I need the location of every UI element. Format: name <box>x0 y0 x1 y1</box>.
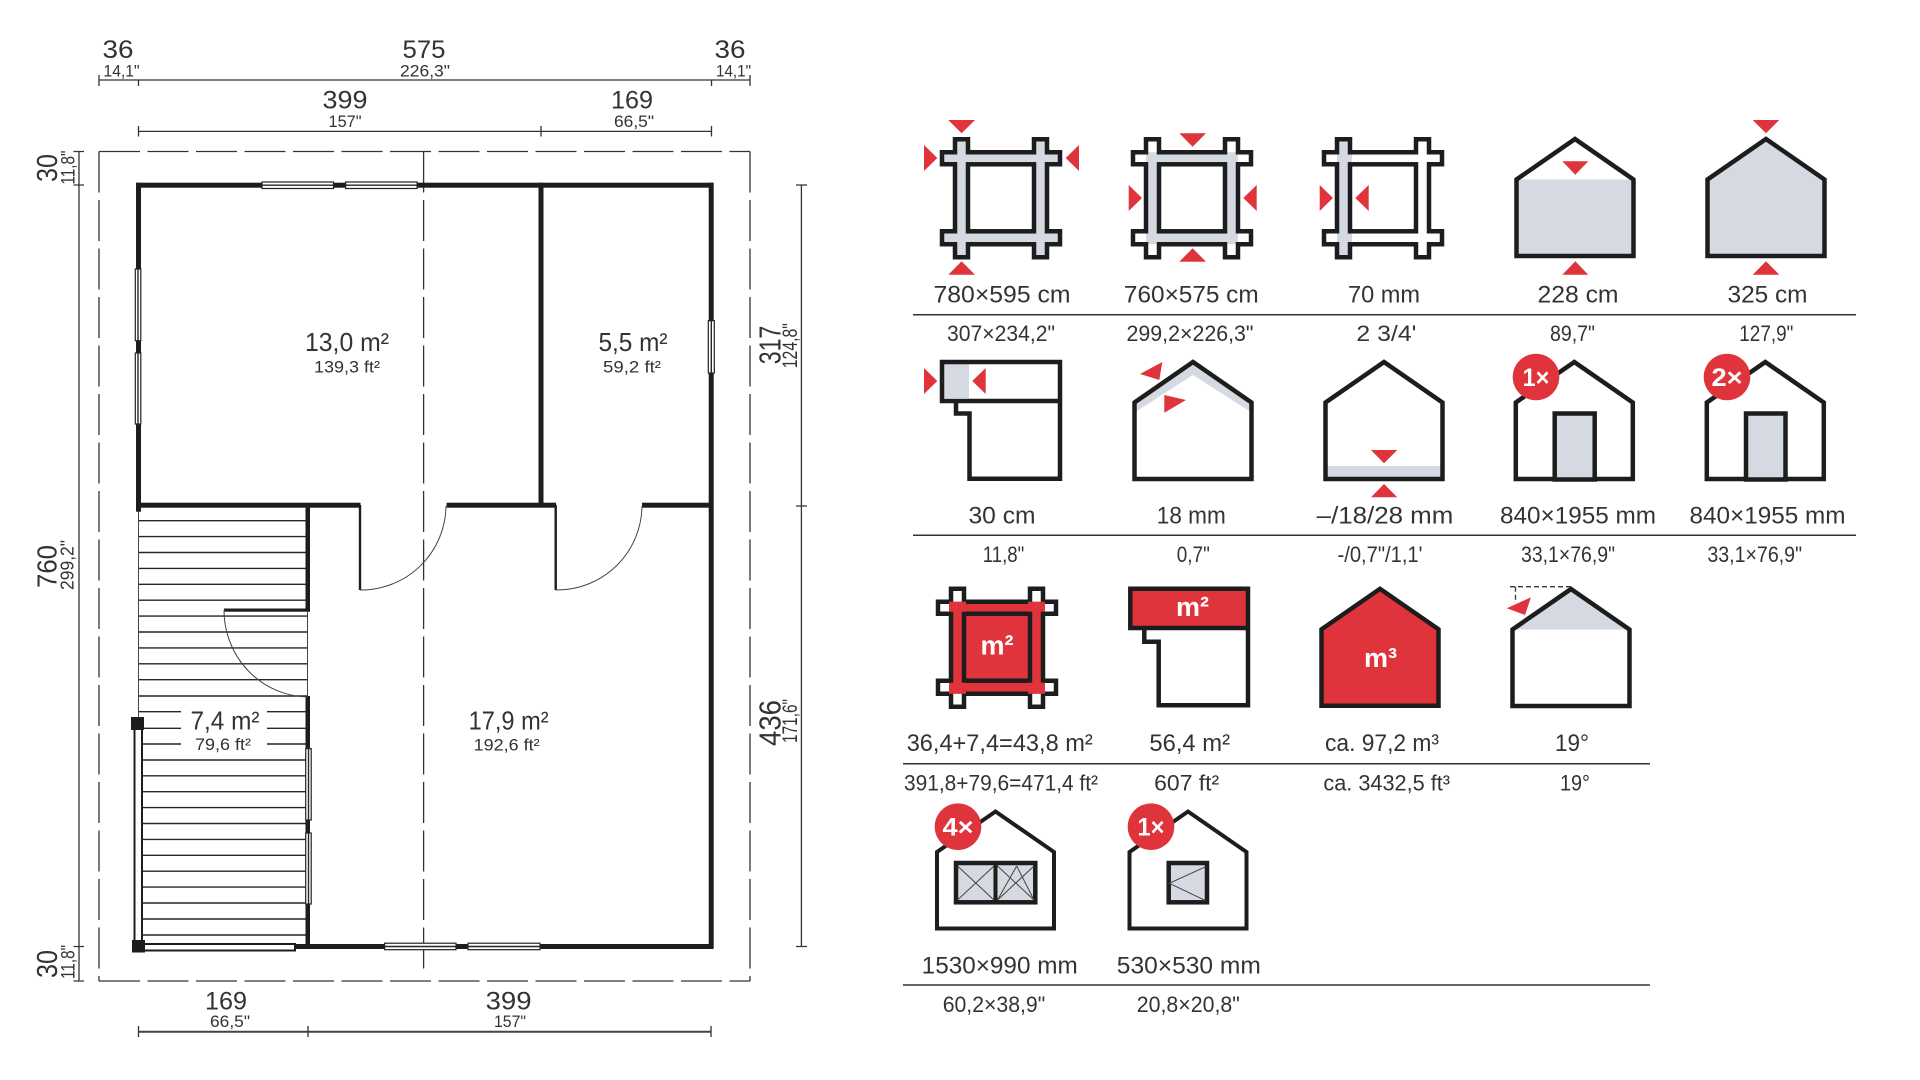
icon: house with small window <box>1130 812 1246 928</box>
spec: wall height 228 cm: 228 cm <box>1538 281 1618 308</box>
spec: roof area: 56,4 m² <box>1149 730 1230 757</box>
spec: roof thickness 18 mm: 0,7" <box>1177 542 1210 567</box>
spec: roof pitch <box>1507 587 1630 796</box>
spec: roof overhang 30 cm <box>924 362 1060 567</box>
dimensions: top overall: 36 <box>102 36 134 64</box>
icon: house roof boards <box>1134 362 1252 479</box>
spec: floor area <box>904 589 1098 796</box>
room areas: 13,0 m² <box>305 327 389 357</box>
icon: house with double window <box>937 812 1054 928</box>
dimensions: top rooms <box>138 87 712 136</box>
icon: red roof area section: m² <box>1176 592 1209 622</box>
dimensions: top rooms: 157" <box>328 112 362 131</box>
spec: roof pitch: 19° <box>1555 730 1589 757</box>
badge: 4× <box>935 803 981 850</box>
spec: wall thickness 70 mm: 70 mm <box>1348 281 1420 308</box>
badge: 2× <box>1704 354 1750 400</box>
dimensions: bottom: 399 <box>486 988 532 1016</box>
icon: red floor area frame: m² <box>980 631 1014 661</box>
spec: wall height 228 cm: 89,7" <box>1550 321 1595 346</box>
dimensions: right: 436 <box>752 700 788 746</box>
spec: total height 325 cm <box>1708 120 1824 346</box>
spec: double door: 33,1×76,9" <box>1707 542 1802 567</box>
spec: floor area: 36,4+7,4=43,8 m² <box>907 730 1093 757</box>
icon: house with door <box>1707 362 1824 480</box>
icon: house floor <box>1326 362 1442 479</box>
icon: log frame outer size <box>942 139 1060 257</box>
room areas: 139,3 ft² <box>314 357 380 376</box>
dimensions: right: 317 <box>752 326 788 364</box>
dimensions: left: 30 <box>32 950 64 978</box>
dimensions: left: 760 <box>32 545 62 588</box>
windows <box>135 182 714 950</box>
icon: house roof pitch <box>1512 589 1630 706</box>
dimensions: top overall: 226,3" <box>400 62 450 80</box>
badge: 4×: 4× <box>942 814 974 842</box>
dimensions: left: 11,8" <box>58 945 80 979</box>
badge: 2×: 2× <box>1712 364 1742 392</box>
spec: roof overhang 30 cm: 11,8" <box>983 542 1024 567</box>
icon: house total height <box>1708 139 1824 256</box>
spec: wall footprint 760×575 cm <box>1124 133 1259 346</box>
icon: red arrows <box>1140 362 1186 413</box>
row dividers <box>903 315 1856 985</box>
dimensions: right <box>752 185 807 946</box>
icon: pitch angle marker <box>1507 587 1571 615</box>
dimensions: top overall: 14,1" <box>716 62 751 80</box>
dimensions: top rooms: 399 <box>322 87 368 115</box>
spec: outer footprint 780×595 cm: 780×595 cm <box>934 281 1070 308</box>
dimensions: top overall <box>99 36 751 86</box>
spec: single door <box>1500 354 1656 567</box>
room areas: 79,6 ft² <box>195 735 251 754</box>
spec: floor thickness <box>1317 362 1453 567</box>
icon: red arrows <box>924 120 1079 275</box>
icon: house wall height <box>1516 139 1634 256</box>
dimensions: bottom <box>138 988 711 1037</box>
badge: 1×: 1× <box>1138 814 1164 842</box>
spec: roof thickness 18 mm <box>1134 362 1252 567</box>
icon: red arrows <box>1753 120 1779 275</box>
spec: single door: 33,1×76,9" <box>1521 542 1615 567</box>
icon: log frame wall thickness <box>1324 139 1442 257</box>
badge: 1×: 1× <box>1522 364 1550 392</box>
spec: roof thickness 18 mm: 18 mm <box>1157 502 1226 529</box>
spec: total height 325 cm: 325 cm <box>1728 281 1808 308</box>
spec: wall thickness 70 mm: 2 3/4' <box>1356 321 1416 346</box>
room areas: 192,6 ft² <box>474 736 540 755</box>
spec: double door: 840×1955 mm <box>1690 502 1846 529</box>
spec: volume: ca. 3432,5 ft³ <box>1323 770 1450 796</box>
dimensions: right: 124,8" <box>779 323 802 368</box>
spec: roof overhang 30 cm: 30 cm <box>968 502 1036 529</box>
icon: log frame wall size <box>1133 139 1251 257</box>
panel: specification icons <box>903 120 1856 1017</box>
icon: overhang section <box>942 362 1060 479</box>
terrace railing and posts <box>131 717 295 952</box>
roof overhang outline <box>99 152 750 981</box>
room areas <box>190 327 668 755</box>
dimensions: left: 30 <box>32 154 64 182</box>
icon: red floor area frame <box>938 589 1056 707</box>
room areas: 17,9 m² <box>469 706 549 736</box>
room areas: 59,2 ft² <box>603 357 661 376</box>
room areas: 5,5 m² <box>598 327 668 357</box>
dimensions: left <box>32 151 84 981</box>
room areas: 7,4 m² <box>190 706 260 736</box>
spec: large window: 60,2×38,9" <box>943 992 1045 1017</box>
dimensions: left: 299,2" <box>58 540 78 590</box>
icon: red house volume: m³ <box>1364 643 1397 673</box>
spec: roof area: 607 ft² <box>1154 770 1219 796</box>
dimensions: top overall: 36 <box>714 36 746 64</box>
dimensions: bottom: 157" <box>494 1012 526 1031</box>
spec: wall footprint 760×575 cm: 299,2×226,3" <box>1126 321 1254 346</box>
dimensions: right: 171,6" <box>779 699 802 743</box>
dimensions: top rooms: 66,5" <box>614 112 654 131</box>
spec: double door <box>1690 354 1846 567</box>
spec: wall height 228 cm <box>1516 139 1634 346</box>
icon: house with door <box>1516 362 1633 480</box>
spec: small window: 530×530 mm <box>1117 952 1261 979</box>
spec: floor thickness: –/18/28 mm <box>1317 502 1453 529</box>
spec: wall thickness 70 mm <box>1320 139 1442 346</box>
walls <box>136 183 714 949</box>
dimensions: top rooms: 169 <box>611 87 653 115</box>
icon: red arrows <box>924 368 986 394</box>
spec: single door: 840×1955 mm <box>1500 502 1656 529</box>
spec: outer footprint 780×595 cm <box>924 120 1079 346</box>
icon: red house volume <box>1322 589 1438 706</box>
spec: small window: 20,8×20,8" <box>1137 992 1240 1017</box>
icon: red arrows <box>1320 185 1369 211</box>
spec: floor area: 391,8+79,6=471,4 ft² <box>904 770 1098 796</box>
badge: 1× <box>1128 803 1174 850</box>
spec: outer footprint 780×595 cm: 307×234,2" <box>947 321 1055 346</box>
icon: red arrows <box>1562 161 1588 275</box>
icon: red arrows <box>1371 450 1397 497</box>
spec: volume <box>1322 589 1450 796</box>
spec: large window: 1530×990 mm <box>922 952 1078 979</box>
icon: red roof area section <box>1130 589 1248 705</box>
dimensions: left: 11,8" <box>58 151 80 185</box>
dimensions: top overall: 575 <box>402 36 446 64</box>
dimensions: top overall: 14,1" <box>104 62 140 80</box>
spec: small window <box>1117 803 1261 1017</box>
spec: large window <box>922 803 1078 1017</box>
icon: red arrows <box>1129 133 1257 262</box>
spec: floor thickness: -/0,7"/1,1' <box>1338 542 1422 567</box>
dimensions: bottom: 169 <box>205 988 247 1016</box>
door swing arcs <box>224 506 642 697</box>
spec: volume: ca. 97,2 m³ <box>1325 730 1439 757</box>
spec: roof area <box>1130 589 1248 796</box>
badge: 1× <box>1513 354 1559 400</box>
panel: floor plan <box>32 36 807 1037</box>
spec: total height 325 cm: 127,9" <box>1739 321 1793 346</box>
terrace floor boards <box>138 511 308 935</box>
dimensions: bottom: 66,5" <box>210 1012 250 1031</box>
spec: roof pitch: 19° <box>1560 770 1590 796</box>
spec: wall footprint 760×575 cm: 760×575 cm <box>1124 281 1259 308</box>
